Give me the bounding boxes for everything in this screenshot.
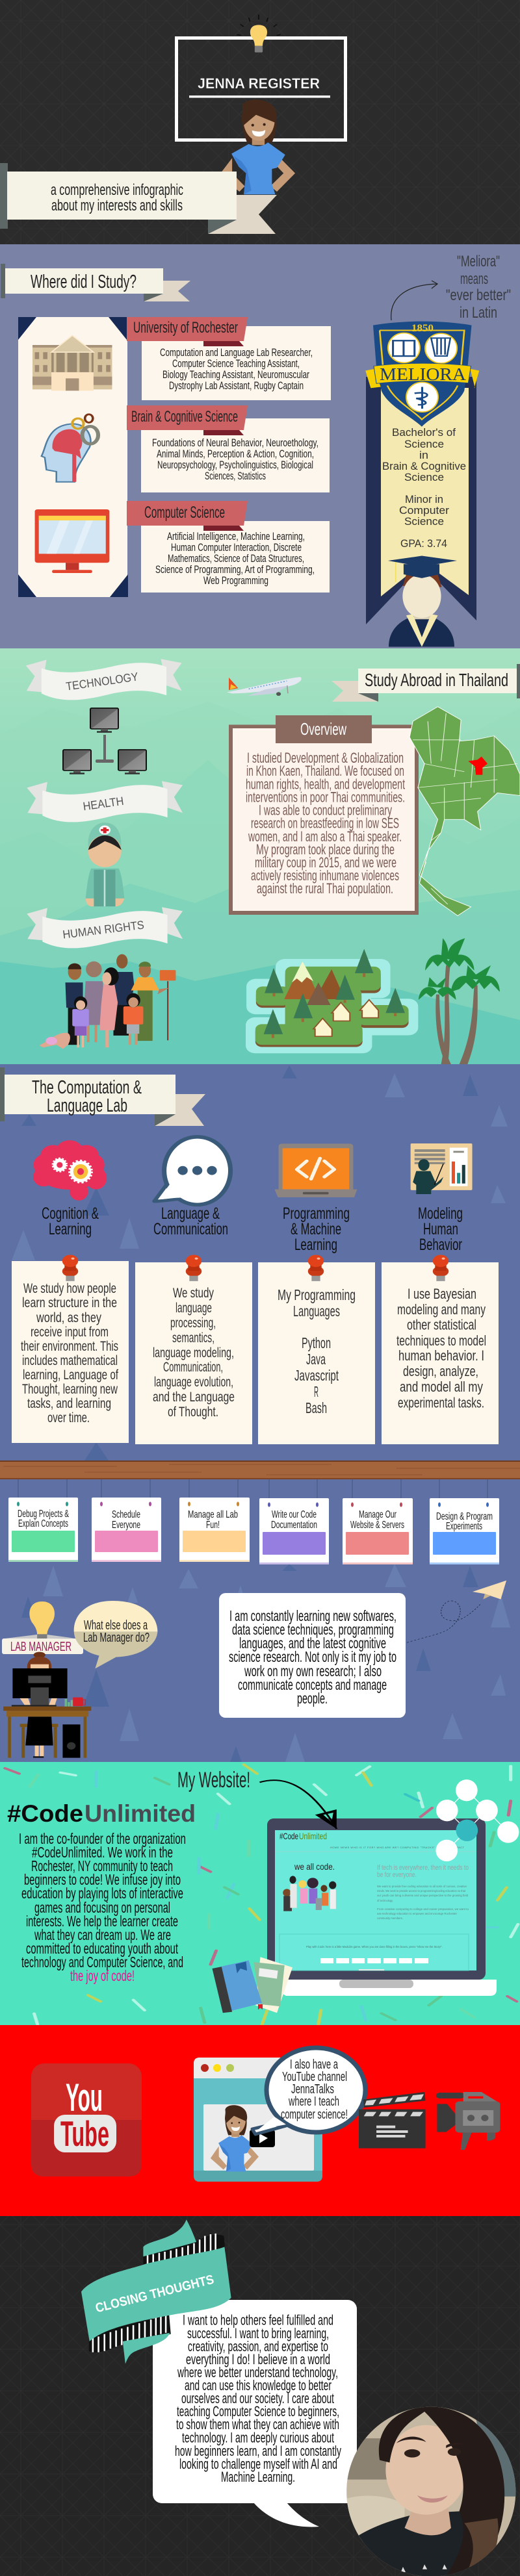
speech bubble: closing text: everything I do! I believe in a world — [186, 2351, 330, 2367]
ribbon: subtitle — [0, 163, 277, 234]
icon: push pins — [62, 1255, 448, 1281]
note: Meliora meaning — [446, 253, 511, 322]
text box: constantly learning: communicate concepts and manage — [238, 1676, 387, 1693]
note card: language and communication: language evolution, — [154, 1375, 233, 1390]
icon: YouTube logo: Tube — [60, 2113, 109, 2154]
icon: clapperboard — [359, 2092, 426, 2149]
card: university of rochester — [127, 317, 331, 400]
note card: language and communication: We study — [173, 1286, 214, 1301]
icon: nurse — [86, 823, 124, 906]
icon: YouTube logo: You — [66, 2076, 103, 2119]
card: schedule everyone — [92, 1498, 161, 1562]
lab topic titles: Communication — [153, 1220, 228, 1238]
note: Meliora meaning: in Latin — [460, 304, 497, 322]
hanging cards: lab manager tasks — [8, 1479, 499, 1564]
crest: University of Rochester: MELIORA — [380, 364, 467, 384]
speech bubble: closing text: and can use this knowledge to better — [185, 2377, 332, 2393]
ribbon: human rights — [27, 907, 183, 948]
website tagline — [377, 1864, 469, 1879]
handwritten note: my website: My Website! — [177, 1768, 250, 1792]
card: brain and cognitive science: Sciences, Statistics — [205, 470, 266, 482]
illustration: group of people — [39, 954, 176, 1049]
note card: cognition and learning: world, as they — [36, 1310, 101, 1325]
illustration: woman presenter — [211, 2105, 259, 2172]
lab topic titles: & Machine — [291, 1220, 341, 1238]
icon: books — [213, 1957, 292, 2013]
section: CodeUnlimited — [0, 1762, 520, 2025]
banner: degree ribbon: Computer — [399, 505, 450, 516]
overview text: human rights, health, and development — [246, 776, 405, 793]
card: manage lab fun: Manage all Lab — [188, 1509, 238, 1520]
text box: constantly learning: people. — [297, 1690, 328, 1707]
speech bubble: YouTube channel: YouTube channel — [282, 2070, 347, 2084]
banner: degree ribbon: Minor in — [405, 494, 443, 505]
note card: modeling human behavior: other statistical — [407, 1316, 476, 1333]
icon: university building — [32, 335, 112, 390]
card: brain and cognitive science: Neuropsychology, Psycholinguistics, Biological — [157, 459, 313, 471]
speech bubble: closing text: Machine Learning. — [221, 2469, 295, 2485]
card: computer science: Human Computer Interaction, Discrete — [171, 541, 302, 554]
ribbon: health: HEALTH — [82, 795, 125, 813]
overview text: interventions in poor Thai communities. — [246, 789, 405, 806]
text box: constantly learning: work on my own research; I also — [244, 1663, 382, 1679]
speech bubble: YouTube channel: I also have a — [290, 2058, 339, 2072]
overview header — [276, 715, 372, 743]
lab topic titles: Learning — [294, 1236, 337, 1254]
website illustration: we all code: we all code. — [294, 1861, 335, 1872]
card: design and program experiments: Design & Program — [436, 1511, 493, 1522]
lab topic titles: Cognition & — [42, 1205, 99, 1223]
card: manage website and servers: Manage Our — [359, 1509, 396, 1520]
ribbon: subtitle: about my interests and skills — [51, 197, 183, 214]
wooden shelf — [0, 1460, 520, 1479]
section: YouTube — [0, 2025, 520, 2217]
card: write code documentation — [259, 1498, 329, 1564]
ribbon: health — [27, 781, 183, 822]
website header: Unlimited — [299, 1831, 327, 1841]
section: closing thoughts — [0, 2216, 520, 2576]
website paragraph: our youth can bring a diverse and unique perspective to the growing field — [377, 1894, 468, 1897]
overview text — [246, 750, 405, 897]
card: university of rochester: Computer Science Teaching Assistant, — [172, 357, 300, 370]
panel: icon column — [18, 317, 128, 597]
banner: degree ribbon: Science — [404, 439, 444, 450]
lab topic titles: Learning — [49, 1220, 92, 1238]
banner: degree ribbon: Science — [404, 472, 444, 483]
speech bubble: closing text: creativity, passion, and expertise to — [188, 2338, 328, 2354]
overview text: women, and I am also a Thai speaker. — [248, 828, 402, 845]
icon: play button — [250, 2130, 275, 2147]
note card: modeling human behavior: experimental tasks. — [398, 1394, 484, 1411]
ribbon: subtitle: a comprehensive infographic — [51, 181, 183, 199]
illustration: woman — [219, 99, 295, 194]
illustration: video browser window — [194, 2058, 322, 2182]
speech bubble: YouTube channel: computer science! — [281, 2108, 348, 2122]
note card: cognition and learning: receive input from — [31, 1325, 109, 1340]
website header: HOME NEWS WHO IS IT FOR? WHO ARE WE? COMPUTING "TRACKS" EXTRAS CONTACT — [330, 1846, 465, 1849]
ribbon: technology: TECHNOLOGY — [65, 670, 139, 693]
heading ribbon: where did I study: Where did I Study? — [31, 272, 136, 292]
speech bubble: lab manager question: Lab Manager do? — [83, 1631, 150, 1645]
website tagline: be for everyone. — [377, 1871, 417, 1879]
section: where did I study — [0, 244, 520, 648]
banner: degree ribbon: in — [419, 450, 428, 461]
section: study abroad in Thailand — [0, 648, 520, 1064]
speech bubble: closing text: to show them what they can achieve with — [176, 2416, 339, 2432]
note card: programming languages — [258, 1262, 375, 1444]
ribbon: human rights: HUMAN RIGHTS — [62, 918, 145, 941]
note card: programming languages: Java — [306, 1351, 326, 1368]
note card: modeling human behavior: human behavior. I — [398, 1347, 484, 1364]
heading ribbon: study abroad in Thailand — [332, 664, 520, 702]
card: schedule everyone: Schedule — [112, 1509, 140, 1520]
website paragraph: use technology education to empower and encourage Rochester — [377, 1912, 457, 1915]
icon: molecule network — [436, 1779, 519, 1861]
title: CodeUnlimited: #Code — [7, 1800, 83, 1827]
icon: laptop with code — [274, 1143, 357, 1197]
card: debug projects — [8, 1498, 78, 1562]
speech bubble: closing text: looking to challenge myself with AI and — [179, 2456, 337, 2472]
note card: programming languages: Python — [302, 1334, 331, 1351]
overview text: My program took place during the — [256, 841, 395, 858]
card: brain and cognitive science: Brain & Cognitive Science — [131, 408, 238, 426]
text: CodeUnlimited description: I am the co-founder of the organization — [19, 1830, 186, 1847]
speech bubble: closing text: ourselves and our society. I care about — [181, 2390, 334, 2406]
lab topic titles — [42, 1205, 463, 1254]
note card: language and communication: language — [176, 1301, 212, 1316]
card: design and program experiments — [430, 1498, 499, 1564]
website illustration: we all code — [283, 1861, 336, 1911]
card: brain and cognitive science: Foundations of Neural Behavior, Neuroethology, — [152, 437, 318, 449]
card: university of rochester: Biology Teaching Assistant, Neuromuscular — [162, 368, 309, 381]
text: CodeUnlimited description: interests. We help the learner create — [26, 1913, 178, 1930]
card: computer science: Science of Programming, Art of Programming, — [155, 563, 315, 576]
note card: programming languages: Languages — [293, 1303, 340, 1320]
icon: networked computers — [63, 708, 146, 774]
arrow: to website — [259, 1780, 337, 1829]
icon: brain with gears — [33, 1140, 107, 1201]
text box: constantly learning: science research. Not only is it my job to — [229, 1648, 396, 1665]
note card: programming languages: Javascript — [294, 1367, 339, 1384]
illustration: lab manager at desk — [3, 1652, 91, 1758]
lab topic titles: Modeling — [418, 1205, 463, 1223]
text: CodeUnlimited description: games and focusing on personal — [34, 1899, 170, 1916]
speech bubble: YouTube channel: JennaTalks — [291, 2082, 334, 2097]
section: header — [0, 0, 520, 245]
card: computer science: Computer Science — [144, 504, 225, 522]
banner: degree ribbon: Bachelor's of — [392, 427, 456, 439]
card: write code documentation: Documentation — [271, 1520, 317, 1531]
text: CodeUnlimited description: #CodeUnlimited. We work in the — [32, 1844, 173, 1861]
note card: modeling human behavior: I use Bayesian — [408, 1286, 476, 1302]
website paragraph: From creative computing to college and career preparation, we want to — [377, 1907, 469, 1911]
icon: light bulb — [237, 15, 281, 53]
text box: constantly learning: data science techniques, programming — [232, 1621, 394, 1638]
text: CodeUnlimited description: beginners to code! We infuse joy into — [24, 1871, 181, 1888]
card: university of rochester: University of Rochester — [133, 319, 238, 337]
arrow: dashed paper plane path — [407, 1601, 481, 1642]
icon: computer monitor — [35, 509, 109, 573]
note card: language and communication — [135, 1262, 252, 1444]
lab topic titles: Language & — [161, 1205, 220, 1223]
website tagline: If tech is everywhere, then it needs to — [377, 1864, 469, 1872]
speech bubble: YouTube channel: where I teach — [288, 2095, 339, 2109]
note card: cognition and learning: We study how people — [23, 1281, 116, 1296]
speech bubble: closing text: successful. I want to bring learning, — [187, 2325, 329, 2341]
heading ribbon: where did I study — [1, 264, 190, 301]
speech bubble: closing text — [153, 2300, 357, 2527]
map: Thailand — [410, 707, 520, 915]
illustration: island — [255, 949, 409, 1047]
note card: language and communication: processing, — [170, 1316, 216, 1331]
card: write code documentation: Write our Code — [272, 1509, 317, 1520]
note card: cognition and learning — [12, 1261, 129, 1443]
overview text: actively resisting inhumane violences — [251, 867, 399, 884]
overview text: research on breastfeeding in low SES — [251, 815, 399, 832]
text: CodeUnlimited description — [19, 1830, 186, 1984]
illustration: palm trees — [419, 938, 500, 1064]
website header: #Code — [280, 1831, 298, 1841]
text: CodeUnlimited description: technology and Computer Science, and — [21, 1954, 183, 1970]
note card: language and communication: and the Language — [153, 1390, 235, 1405]
note card: cognition and learning: tasks, and learning — [27, 1396, 111, 1411]
text: CodeUnlimited description: what they can dream up. We are — [34, 1926, 171, 1943]
icon: light bulb and lab manager sign: LAB MANAGER — [10, 1640, 72, 1654]
overview text: against the rural Thai population. — [257, 880, 393, 897]
speech bubble: closing text: technology. I am deeply curious about — [182, 2430, 334, 2445]
note card: programming languages: Bash — [306, 1399, 327, 1416]
icon: YouTube logo — [31, 2063, 142, 2176]
title underline — [189, 96, 330, 97]
crest: University of Rochester — [365, 322, 479, 427]
text: CodeUnlimited description: committed to educating youth about — [26, 1940, 178, 1957]
section: the computation and language lab — [0, 1064, 520, 1763]
card: university of rochester: Dystrophy Lab Assistant, Rugby Captain — [169, 379, 304, 392]
speech bubble: closing text: I want to help others feel fulfilled and — [183, 2312, 333, 2328]
website header — [275, 1831, 476, 1852]
note card: programming languages: R — [314, 1383, 318, 1400]
title: CodeUnlimited: Unlimited — [84, 1800, 196, 1827]
speech bubble: YouTube channel — [252, 2048, 365, 2134]
icon: light bulb and lab manager sign — [2, 1601, 83, 1654]
icon: video camera — [436, 2092, 500, 2150]
lab topic titles: Human — [423, 1220, 458, 1238]
overview text: I was able to conduct preliminary — [259, 802, 392, 819]
overview text: I studied Development & Globalization — [247, 750, 404, 766]
note card: language and communication: semantics, — [172, 1331, 214, 1345]
confetti — [5, 1765, 518, 2025]
website paragraph: community members. — [377, 1917, 403, 1920]
icon: speech bubble — [154, 1137, 231, 1205]
text: CodeUnlimited description: Rochester, NY community to teach — [31, 1857, 173, 1874]
card: computer science: Mathematics, Science of Data Structures, — [168, 552, 304, 565]
note card: modeling human behavior: design, analyze, — [403, 1363, 478, 1379]
note card: cognition and learning: Thought, learning new — [22, 1382, 118, 1397]
heading ribbon: the computation and language lab — [0, 1067, 205, 1126]
card: design and program experiments: Experiments — [446, 1521, 482, 1532]
card: brain and cognitive science: Animal Minds, Perception & Action, Cognition, — [157, 448, 314, 460]
banner: degree ribbon: GPA: 3.74 — [400, 538, 447, 550]
ribbon: closing thoughts — [81, 2219, 231, 2364]
note card: modeling human behavior: modeling and many — [397, 1301, 486, 1318]
card: manage website and servers: Website & Servers — [350, 1520, 404, 1531]
note card: programming languages: My Programming — [278, 1286, 356, 1303]
speech bubble: lab manager question — [74, 1601, 157, 1668]
text: CodeUnlimited description: the joy of code! — [70, 1967, 135, 1984]
card: debug projects: Debug Projects & — [18, 1509, 69, 1520]
note card: cognition and learning: learning, Language of — [23, 1368, 118, 1383]
speech bubble: closing text: how beginners learn, and I am constantly — [175, 2443, 341, 2459]
card: schedule everyone: Everyone — [112, 1520, 140, 1531]
card: brain and cognitive science — [127, 405, 330, 492]
website paragraph: minds. We seek to provide access to programming/coding education so that — [377, 1889, 466, 1893]
arrow: to crest — [391, 281, 437, 320]
photo: Jenna — [345, 2404, 517, 2576]
text: CodeUnlimited description: education by playing lots of interactive — [21, 1885, 183, 1902]
illustration: graduate — [388, 556, 457, 646]
illustration: airplane — [226, 677, 302, 696]
website game box — [280, 1934, 469, 1970]
text box: constantly learning: languages, and the latest cognitive — [239, 1635, 386, 1651]
overview text: military coup in 2015, and we were — [255, 854, 396, 871]
note card: language and communication: language modeling, — [153, 1345, 234, 1360]
note: Meliora meaning: means — [460, 270, 488, 288]
website paragraph — [377, 1885, 469, 1920]
note card: modeling human behavior — [382, 1262, 499, 1444]
lab topic titles: Programming — [283, 1205, 350, 1223]
card: computer science: Web Programming — [203, 574, 268, 587]
website paragraph: We want to provide free coding education to all sorts of curious, creative — [377, 1885, 467, 1888]
website game box: Play with Code: here is a little MadLibs game. When you are done filling in the boxes, press "Show me the Story!". — [306, 1945, 443, 1948]
icon: presenter at board — [411, 1143, 473, 1194]
ribbon: closing thoughts: CLOSING THOUGHTS — [94, 2273, 215, 2315]
overview header: Overview — [300, 719, 346, 739]
banner: degree ribbon: Science — [404, 516, 444, 528]
card: debug projects: Explain Concepts — [18, 1518, 68, 1529]
crest: University of Rochester: 1850 — [411, 323, 434, 334]
note card: cognition and learning: includes mathematical — [22, 1353, 118, 1368]
ribbon: technology — [26, 659, 182, 700]
speech bubble: closing text: teaching Computer Science to beginners, — [177, 2403, 339, 2419]
note card: language and communication: Communication, — [163, 1360, 223, 1375]
speech bubble: lab manager question: What else does a — [84, 1618, 148, 1633]
card: manage website and servers — [343, 1498, 413, 1564]
text box: constantly learning — [219, 1593, 406, 1718]
heading ribbon: the computation and language lab: The Computation & — [32, 1077, 142, 1098]
icon: paper plane — [473, 1581, 506, 1600]
note card: cognition and learning: their environment. This — [21, 1339, 118, 1354]
note card: cognition and learning: learn structure in the — [22, 1295, 117, 1310]
banner: degree ribbon — [366, 377, 476, 624]
speech bubble: closing text: where we better understand technology, — [177, 2364, 338, 2380]
title frame — [177, 38, 346, 140]
heading ribbon: the computation and language lab: Language Lab — [47, 1095, 127, 1116]
website paragraph: of technology. — [377, 1899, 393, 1902]
card: computer science — [127, 501, 330, 593]
panel: overview — [229, 715, 419, 915]
note card: modeling human behavior: and model all my — [400, 1379, 483, 1395]
title: CodeUnlimited — [7, 1800, 196, 1827]
card: manage lab fun: Fun! — [206, 1520, 220, 1531]
icon: brain and gears — [42, 414, 98, 482]
title: JENNA REGISTER — [198, 75, 320, 92]
note: Meliora meaning: "Meliora" — [457, 253, 500, 270]
card: computer science: Artificial Intelligence, Machine Learning, — [167, 530, 305, 542]
note card: cognition and learning: over time. — [47, 1410, 90, 1425]
card: manage lab fun — [179, 1498, 250, 1562]
banner: degree ribbon: Brain & Cognitive — [382, 461, 466, 472]
note card: language and communication: of Thought. — [168, 1405, 218, 1420]
card: university of rochester: Computation and Language Lab Researcher, — [160, 346, 313, 359]
lab topic titles: Behavior — [419, 1236, 462, 1254]
overview text: in Khon Kaen, Thailand. We focused on — [246, 763, 404, 779]
text box: constantly learning: I am constantly learning new softwares, — [229, 1607, 396, 1624]
illustration: laptop with website — [267, 1818, 497, 1996]
